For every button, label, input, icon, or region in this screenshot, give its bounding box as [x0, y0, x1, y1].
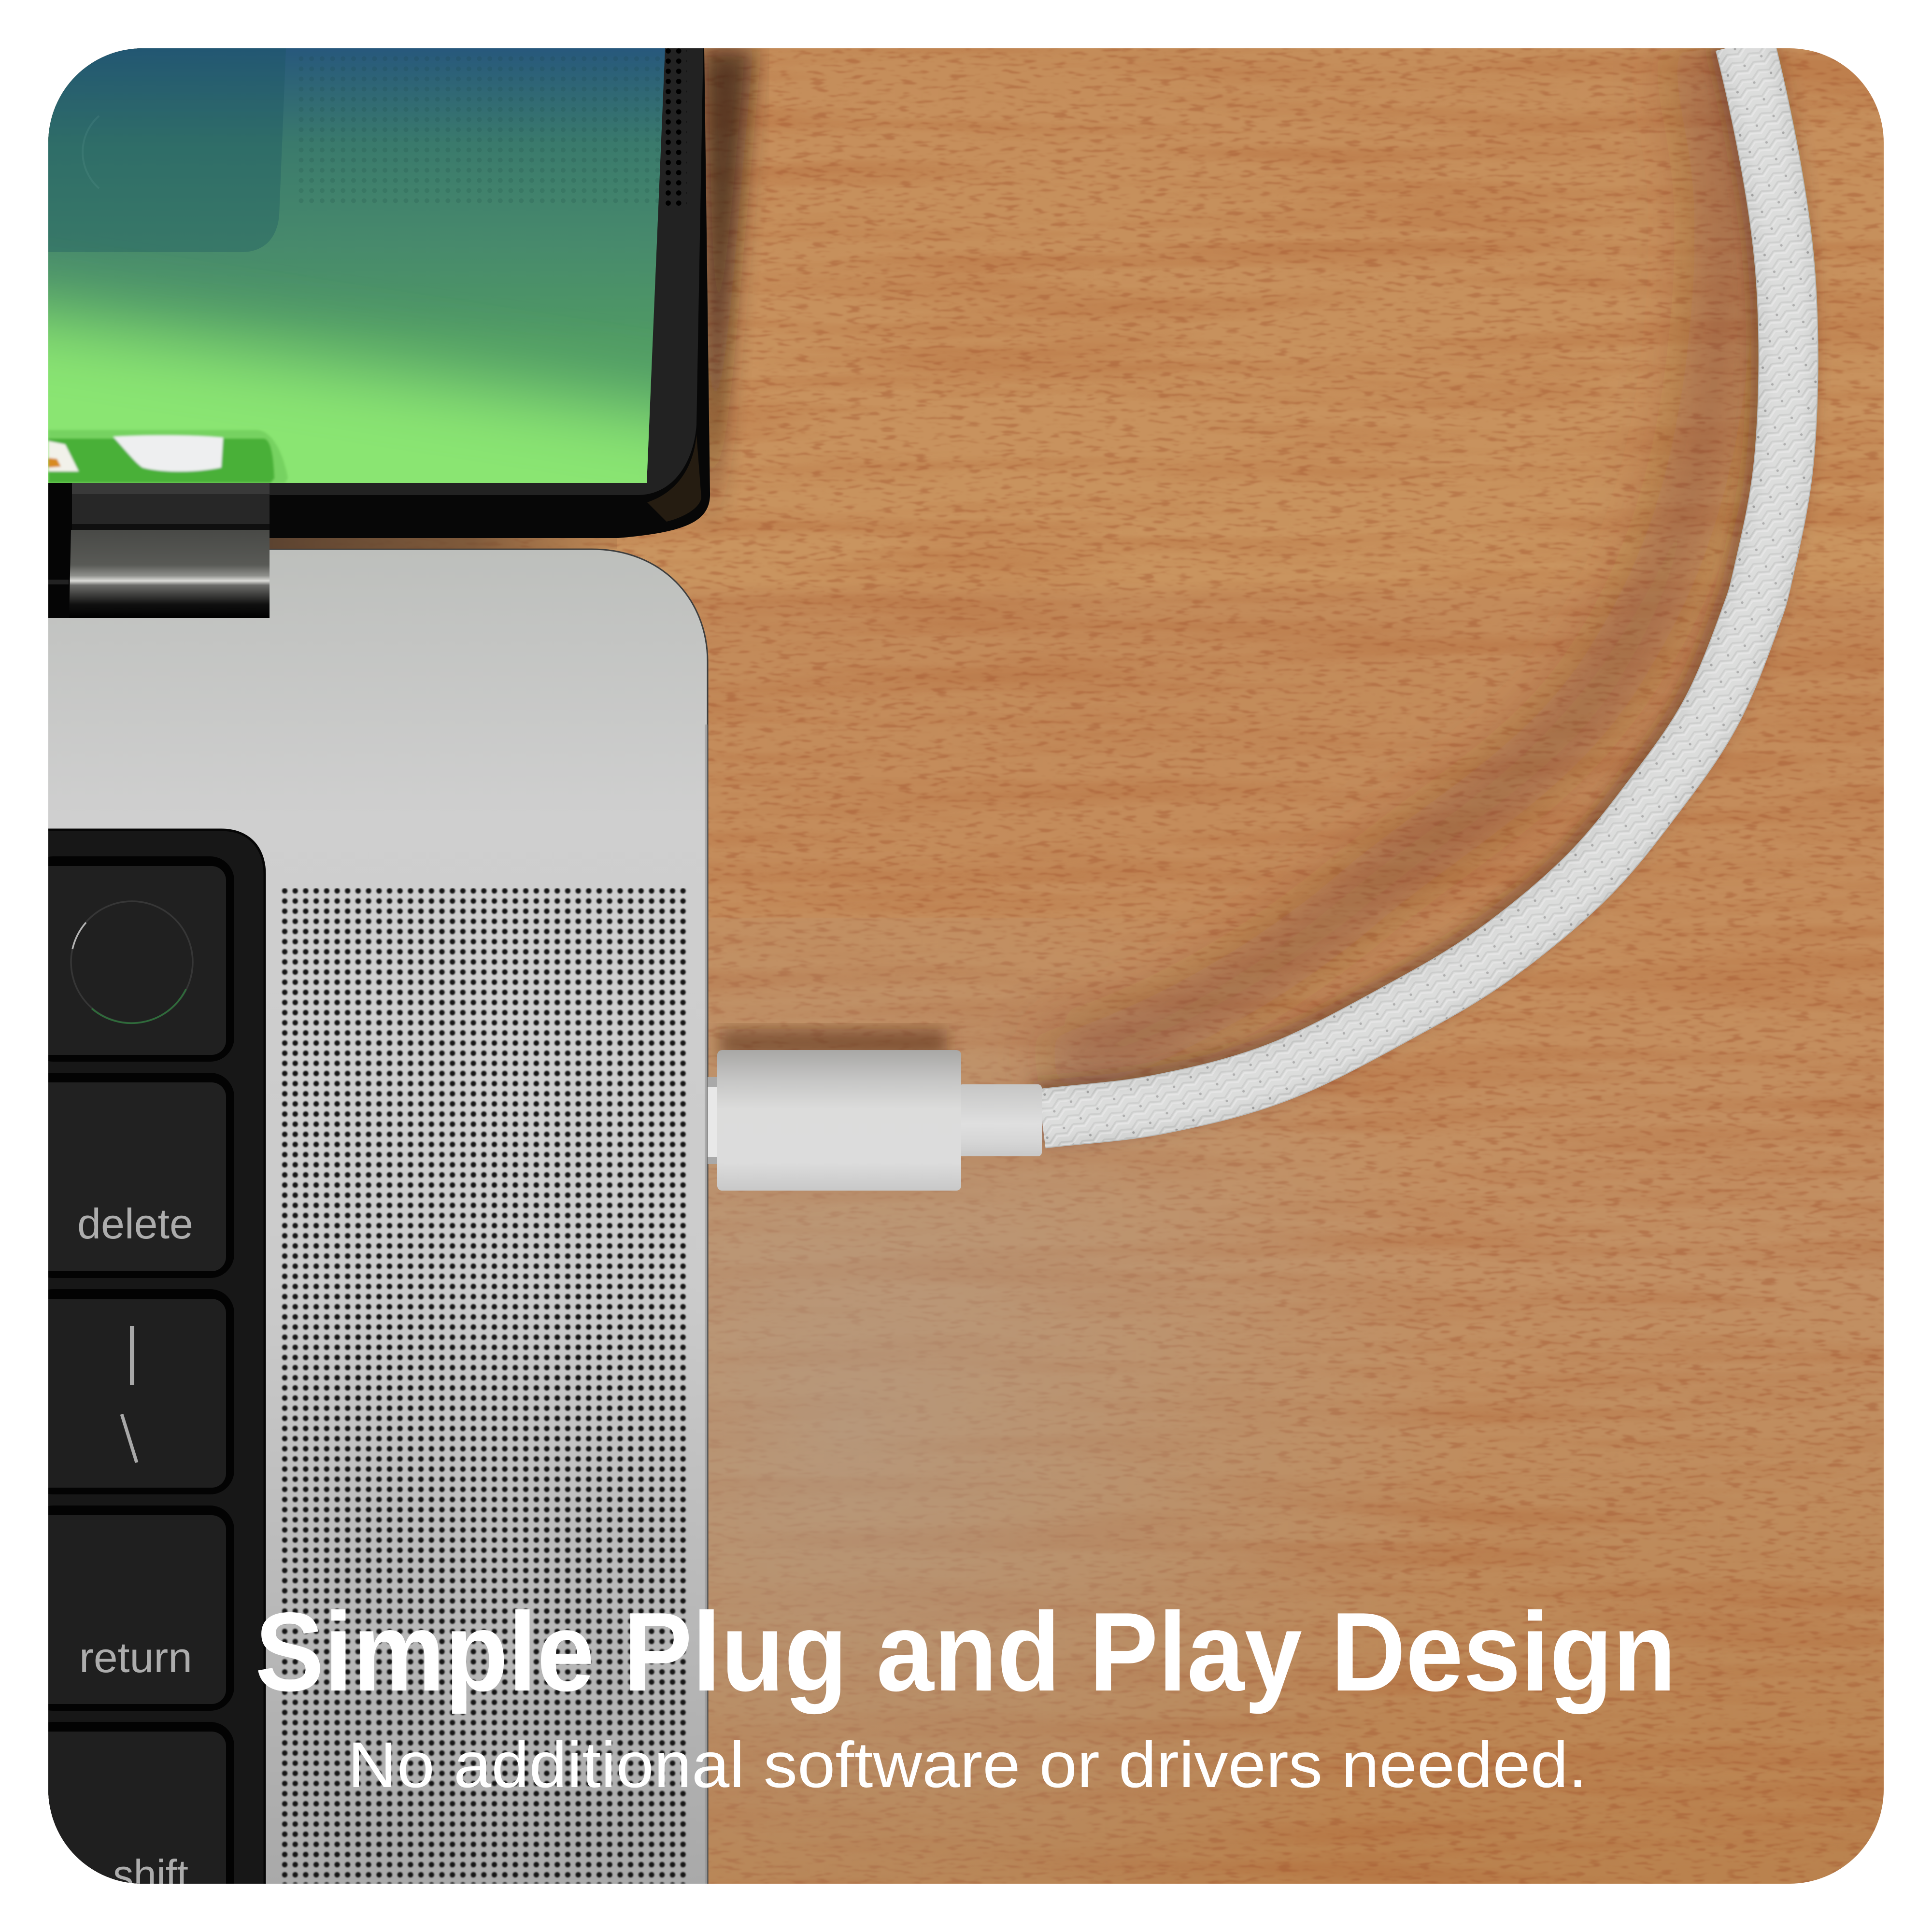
key: delete: delete [77, 1200, 193, 1248]
icon: partial dock app [48, 441, 79, 471]
key: return [29, 1506, 234, 1711]
laptop base [29, 537, 708, 1903]
subtitle: No additional software or drivers needed. [348, 1729, 1587, 1801]
laptop hinge [48, 483, 270, 618]
key: delete [29, 1073, 234, 1278]
key: power button [29, 856, 234, 1062]
usb-c plug [708, 1050, 1042, 1191]
icon: touch id ring [71, 901, 193, 1023]
key: pipe and backslash [29, 1289, 234, 1494]
plug metal tip [708, 1077, 718, 1164]
title: Simple Plug and Play Design [255, 1590, 1676, 1715]
speaker grille [280, 888, 689, 1884]
screen widget panel [48, 48, 286, 252]
laptop screen [0, 48, 724, 676]
icon: white dock app [113, 435, 223, 471]
dock [48, 430, 288, 483]
key: shift: shift [113, 1851, 188, 1899]
keyboard well [29, 830, 265, 1927]
plug shadow on desk [720, 1029, 947, 1058]
plug housing [717, 1050, 961, 1191]
key: shift [29, 1722, 234, 1927]
key: return: return [79, 1634, 192, 1681]
laptop lid bezel [48, 48, 710, 538]
cable strain relief [959, 1084, 1042, 1156]
laptop lid shadow on desk [700, 48, 753, 531]
cable cast shadow [1036, 38, 1783, 1113]
braided cable [1042, 43, 1789, 1119]
